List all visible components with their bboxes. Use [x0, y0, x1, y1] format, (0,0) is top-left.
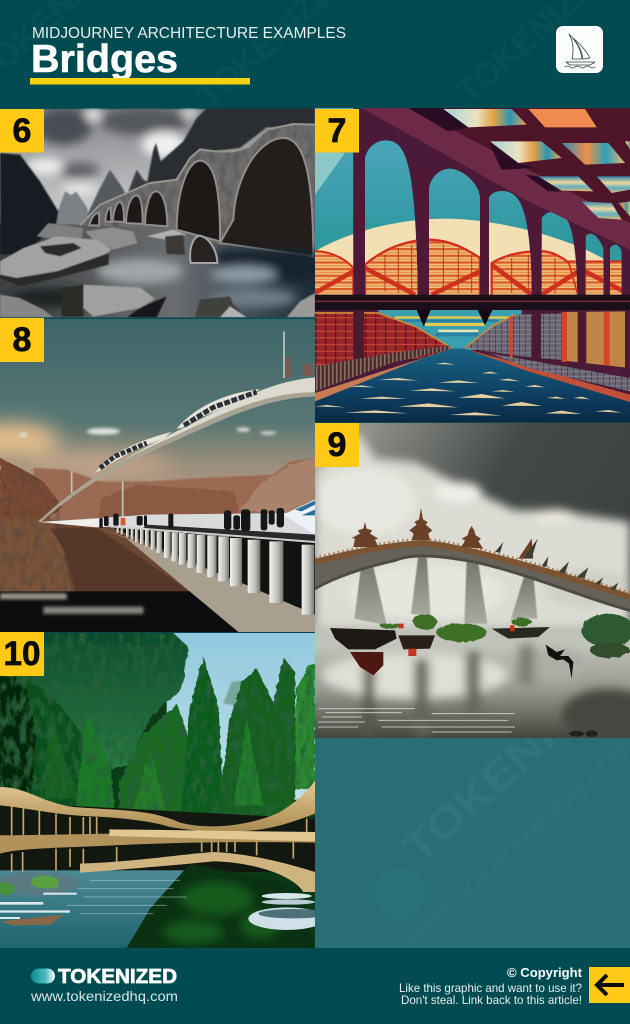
- deck band: [315, 295, 630, 310]
- footer logo: TOKENIZED: [58, 966, 177, 988]
- masts: [72, 331, 284, 518]
- floor: [315, 349, 630, 422]
- title underline: [30, 78, 250, 84]
- image 7: art deco bridge: [308, 108, 630, 422]
- bridge masonry: [80, 124, 315, 252]
- icon: Midjourney sailboat: [556, 26, 603, 73]
- image 10: timber bridge in forest: [0, 633, 328, 948]
- posts: [12, 804, 307, 872]
- arrow box: [589, 967, 630, 1003]
- number badge 7: [315, 109, 359, 152]
- footer url: www.tokenizedhq.com: [30, 988, 178, 1004]
- water: [0, 591, 240, 632]
- upper timber ribbon: [0, 780, 315, 832]
- number badge 6: [0, 109, 44, 152]
- plants and rocks: [0, 872, 80, 895]
- copyright block: © Copyright: [507, 965, 583, 980]
- forest: [0, 657, 315, 832]
- number badge 6: 6: [13, 112, 31, 150]
- number badge 7: 7: [328, 112, 346, 150]
- rocks: [0, 223, 315, 317]
- skylights: [443, 109, 527, 127]
- water ripples: [318, 709, 515, 732]
- arched span: [38, 377, 315, 521]
- panel: empty teal area: [315, 646, 630, 953]
- footer band: [0, 948, 630, 1024]
- lower view: [378, 310, 522, 350]
- header: title block: [30, 25, 346, 84]
- lower arch: [80, 852, 315, 892]
- pagodas: [352, 508, 533, 559]
- boats: [0, 893, 328, 930]
- image 8: futuristic bridge through canyon: [0, 319, 315, 632]
- number badge 8: 8: [13, 321, 31, 359]
- title: Bridges: [31, 38, 178, 81]
- roof spikes: [495, 539, 618, 590]
- interior dark band: [0, 802, 315, 872]
- underside slab and columns: [97, 526, 315, 632]
- dragon silhouette: [546, 645, 573, 679]
- copyright block: [399, 965, 583, 1007]
- copyright block: Like this graphic and want to use it?: [399, 981, 582, 995]
- watermark: panel: [375, 646, 630, 953]
- water: [10, 250, 315, 308]
- mountains: [0, 458, 315, 605]
- watermark: header: [0, 0, 621, 116]
- watermark: panel: www.tokenizedhq.com: [396, 731, 630, 953]
- pillars: [354, 555, 537, 625]
- number badge 9: [315, 423, 359, 467]
- copyright block: Don't steal. Link back to this article!: [401, 993, 582, 1007]
- people on bridge: [99, 508, 284, 531]
- boats and foliage: [330, 628, 397, 649]
- columns shading: [353, 151, 586, 303]
- image 9: pagoda bridge in mist: [305, 423, 630, 742]
- image 6: stone arch bridge: [0, 107, 315, 317]
- road surface and train: [40, 500, 315, 538]
- number badge 8: [0, 318, 44, 362]
- arched windows with sky and trusses: [315, 108, 622, 295]
- eyebrow heading: MIDJOURNEY ARCHITECTURE EXAMPLES: [32, 25, 346, 42]
- number badge 9: 9: [328, 426, 346, 464]
- watermark: panel: TOKENIZED: [394, 646, 630, 873]
- middle deck: [0, 834, 315, 854]
- number badge 10: 10: [4, 635, 40, 673]
- arched bridge: [315, 542, 630, 612]
- back mountain: [6, 632, 189, 770]
- water and reflection: [0, 870, 200, 948]
- overhead beam and ceiling: [362, 108, 630, 250]
